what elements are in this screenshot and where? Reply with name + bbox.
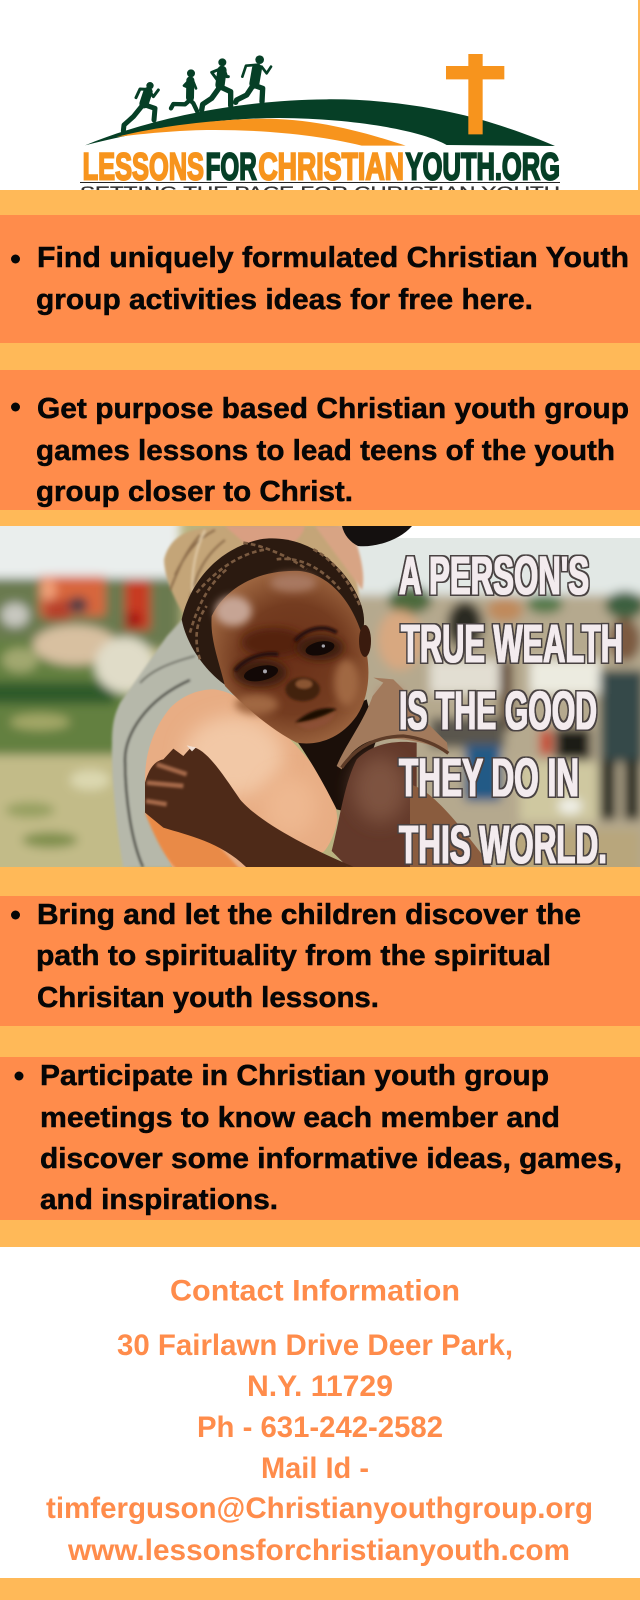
panel: children: Chrisitan youth lessons. <box>37 982 379 1014</box>
child's hair <box>182 538 364 686</box>
logo wordmark: CHRISTIAN <box>258 146 404 188</box>
logo wordmark: LESSONS <box>83 146 204 188</box>
background band: above photo <box>0 510 640 526</box>
logo <box>80 54 560 201</box>
contact details: Mail Id - <box>261 1452 369 1485</box>
woman's arm <box>145 689 337 869</box>
photo: child and arm <box>145 538 493 871</box>
child's face <box>211 571 368 743</box>
panel: meetings: and inspirations. <box>40 1184 278 1216</box>
panel: children: path to spirituality from the spiritual <box>36 940 551 972</box>
background band: above contact <box>0 1220 640 1247</box>
panel: lessons: Get purpose based Christian youth group <box>37 393 629 425</box>
child's dress <box>337 678 448 769</box>
child's eyes and brows <box>235 628 337 684</box>
child's ear <box>359 625 371 657</box>
contact details: 30 Fairlawn Drive Deer Park, <box>117 1329 513 1362</box>
quote text <box>399 546 623 875</box>
logo runners <box>123 55 271 131</box>
background band: bottom <box>0 1578 640 1600</box>
child's neck <box>293 699 377 813</box>
panel: meetings: discover some informative ideas, games, <box>40 1143 622 1175</box>
panel: activities: group activities ideas for free here. <box>36 284 533 316</box>
photo: woman's shirt and shoulder <box>110 618 234 867</box>
contact details: N.Y. 11729 <box>247 1370 393 1403</box>
child's near arm and hand <box>145 747 353 871</box>
logo hill and cross <box>85 54 555 146</box>
contact details: www.lessonsforchristianyouth.com <box>67 1534 570 1567</box>
contact heading: Contact Information <box>170 1274 460 1308</box>
contact details <box>46 1329 593 1567</box>
panel: contact information <box>0 1247 640 1578</box>
photo background <box>0 510 640 880</box>
panel: lessons: group closer to Christ. <box>36 476 353 508</box>
background band: fourth <box>0 1026 640 1057</box>
panel: meetings: meetings to know each member and <box>40 1102 560 1134</box>
logo wordmark <box>80 146 560 201</box>
background band: below photo <box>0 867 640 896</box>
logo wordmark: YOUTH.ORG <box>406 146 560 188</box>
panel: meetings <box>0 1057 640 1220</box>
child's mouth <box>295 708 337 729</box>
logo wordmark: FOR <box>206 146 257 188</box>
child's nose <box>285 677 320 701</box>
photo: woman holding child with quote <box>0 510 640 880</box>
panel: lessons: games lessons to lead teens of the youth <box>36 435 615 467</box>
background band: second <box>0 343 640 370</box>
photo: woman's hair and cap <box>162 526 412 614</box>
contact details: timferguson@Christianyouthgroup.org <box>46 1492 593 1525</box>
child's far arm <box>332 742 417 869</box>
logo wordmark: SETTING THE PACE FOR CHRISTIAN YOUTH <box>80 184 560 201</box>
contact details: Ph - 631-242-2582 <box>197 1411 443 1444</box>
panel: children <box>0 896 640 1026</box>
background band: top <box>0 190 640 215</box>
panel: meetings: Participate in Christian youth group <box>40 1060 549 1092</box>
panel: activities <box>0 215 640 343</box>
panel: activities: Find uniquely formulated Christian Youth <box>37 242 629 274</box>
panel: lessons <box>0 370 640 510</box>
panel: children: Bring and let the children discover the <box>37 899 581 931</box>
child's sleeve <box>410 784 493 869</box>
